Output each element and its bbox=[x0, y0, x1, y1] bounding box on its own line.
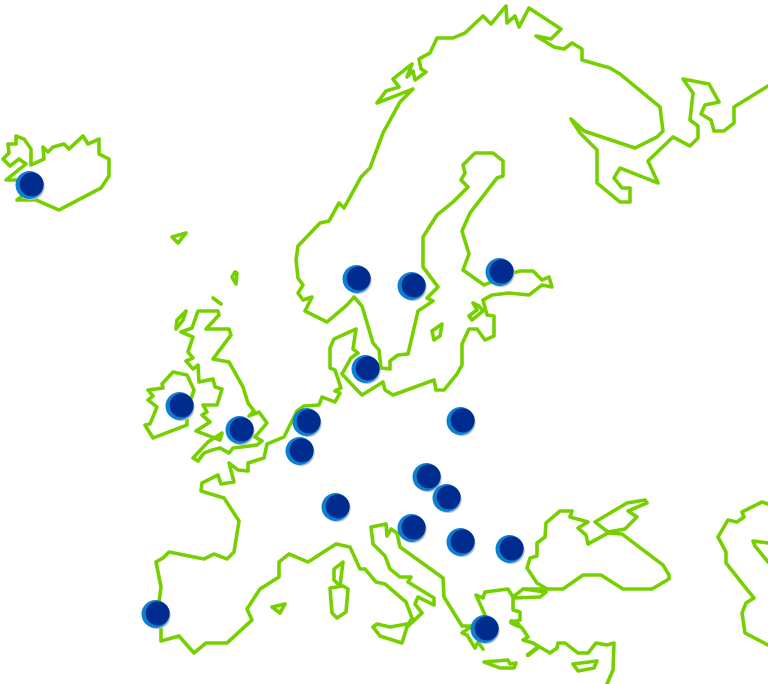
Hebrides bbox=[176, 311, 186, 329]
marker: Czech Republic bbox=[412, 463, 442, 492]
Greece and Thrace bbox=[476, 589, 546, 615]
marker: Switzerland bbox=[322, 493, 351, 522]
Baltic islands bbox=[432, 303, 483, 340]
Scandinavia and northern coast bbox=[156, 6, 768, 602]
Turkey coast bbox=[512, 598, 614, 684]
Iceland bbox=[3, 136, 109, 210]
marker: Serbia bbox=[446, 528, 476, 557]
marker: Slovenia bbox=[398, 514, 427, 543]
marker: Iceland bbox=[16, 171, 45, 200]
Crete bbox=[484, 660, 516, 668]
marker: Sweden bbox=[398, 272, 427, 301]
marker: Poland bbox=[446, 407, 476, 436]
marker: Netherlands bbox=[292, 408, 322, 437]
marker: Greece bbox=[470, 615, 500, 644]
marker: Slovakia bbox=[432, 484, 462, 513]
Black Sea bbox=[523, 511, 669, 589]
marker: Romania bbox=[496, 535, 525, 564]
Aegean islet bbox=[528, 648, 537, 655]
marker: Portugal bbox=[142, 600, 171, 629]
Great Britain bbox=[181, 311, 267, 461]
Cyprus bbox=[573, 661, 597, 671]
small North Atlantic islands bbox=[172, 233, 237, 304]
location markers bbox=[16, 171, 525, 644]
Ireland bbox=[145, 372, 194, 438]
Balearic island bbox=[272, 604, 285, 613]
marker: UK bbox=[226, 416, 255, 445]
Sicily bbox=[373, 624, 407, 643]
Iberia, France and Italy coast bbox=[161, 524, 483, 653]
marker: Finland bbox=[486, 258, 515, 287]
Corsica bbox=[334, 562, 343, 586]
east coast bbox=[718, 502, 768, 645]
Sardinia bbox=[330, 586, 348, 618]
Crimea bbox=[595, 500, 647, 532]
marker: Denmark bbox=[352, 355, 381, 384]
marker: Belgium bbox=[286, 437, 315, 466]
marker: Ireland bbox=[166, 392, 195, 421]
marker: Norway bbox=[342, 265, 372, 294]
